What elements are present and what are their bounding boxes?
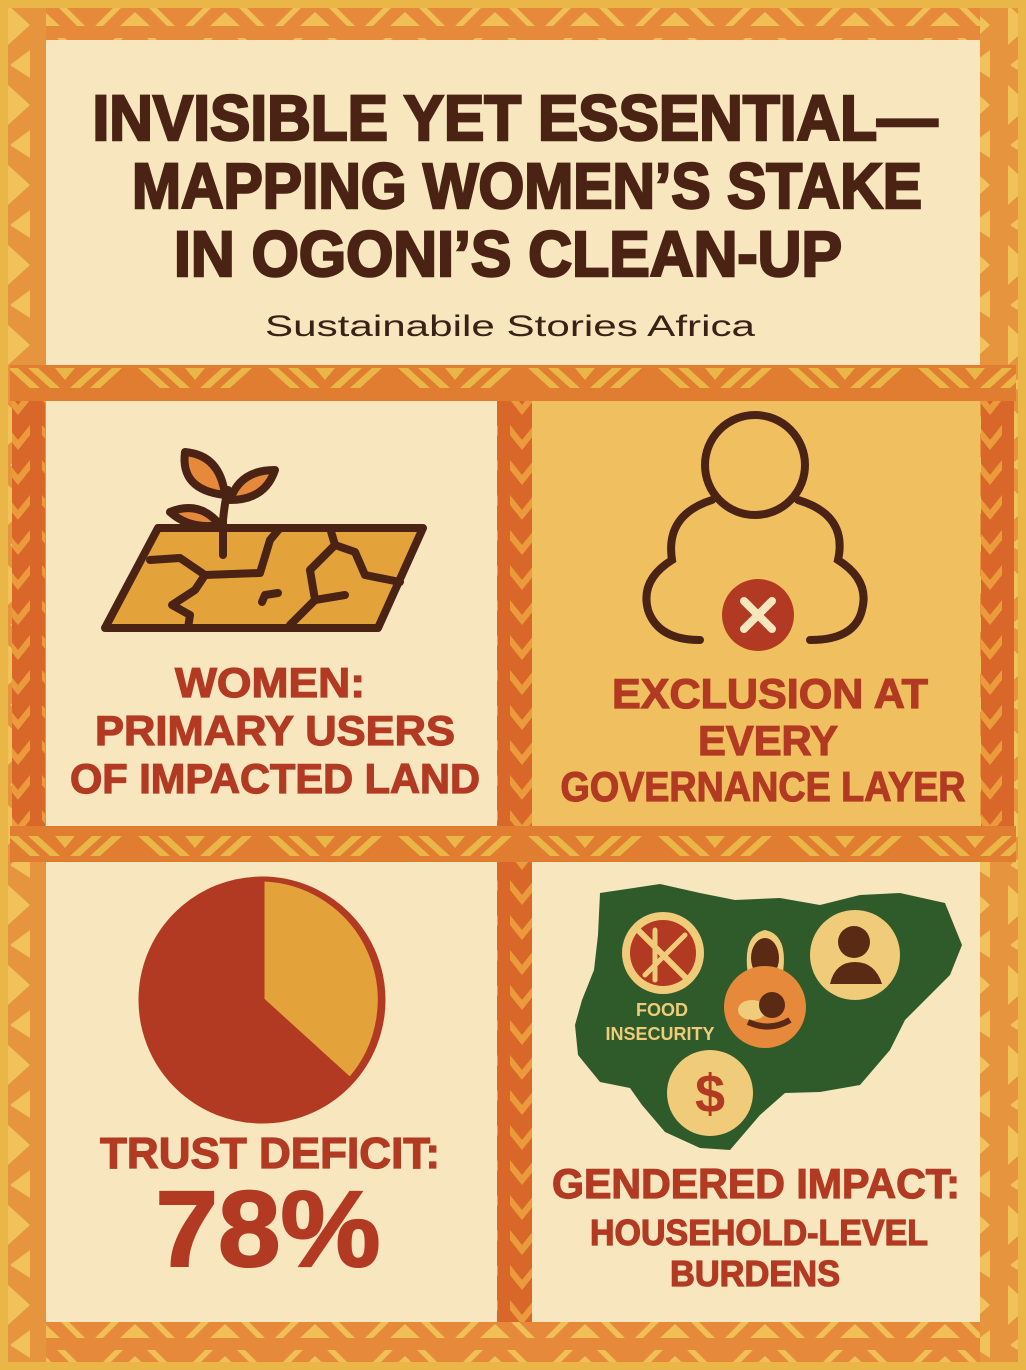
title: INVISIBLE YET ESSENTIAL—: [92, 82, 938, 154]
heading: [552, 1160, 960, 1294]
pie chart: [141, 879, 383, 1121]
heading: OF IMPACTED LAND: [70, 755, 480, 802]
text: food insecurity: FOOD: [636, 1000, 688, 1020]
heading: BURDENS: [670, 1253, 840, 1294]
title: [92, 82, 938, 290]
panel: women primary users: [46, 401, 497, 826]
icon: no food: [622, 912, 704, 994]
icon: dollar: [667, 1050, 753, 1136]
title: IN OGONI’S CLEAN-UP: [174, 218, 842, 290]
text: food insecurity: INSECURITY: [605, 1024, 715, 1044]
stat: 78%: [156, 1168, 380, 1289]
heading: GENDERED IMPACT:: [552, 1160, 960, 1207]
text: food insecurity: [605, 1000, 715, 1044]
heading: [560, 670, 966, 810]
title: MAPPING WOMEN’S STAKE: [132, 150, 922, 222]
heading: EXCLUSION AT: [612, 670, 928, 717]
heading: EVERY: [698, 717, 838, 764]
icon: cracked land with sprout: [105, 452, 423, 628]
panel: gendered impact: [532, 862, 980, 1322]
map: Nigeria with icons: [575, 884, 962, 1150]
heading: [70, 659, 480, 802]
heading: GOVERNANCE LAYER: [560, 763, 966, 810]
heading: PRIMARY USERS: [95, 707, 455, 754]
panel: exclusion: [532, 401, 980, 826]
heading: HOUSEHOLD-LEVEL: [590, 1212, 928, 1253]
icon: person: [810, 910, 900, 1000]
heading: WOMEN:: [175, 659, 365, 706]
subtitle: Sustainabile Stories Africa: [265, 310, 755, 343]
icon: mother and child: [724, 930, 806, 1048]
panel: trust deficit: [46, 862, 497, 1322]
heading: TRUST DEFICIT:: [100, 1129, 440, 1178]
icon: excluded person: [646, 415, 864, 651]
icon: dollar: $: [695, 1064, 725, 1124]
header panel: [46, 40, 980, 365]
